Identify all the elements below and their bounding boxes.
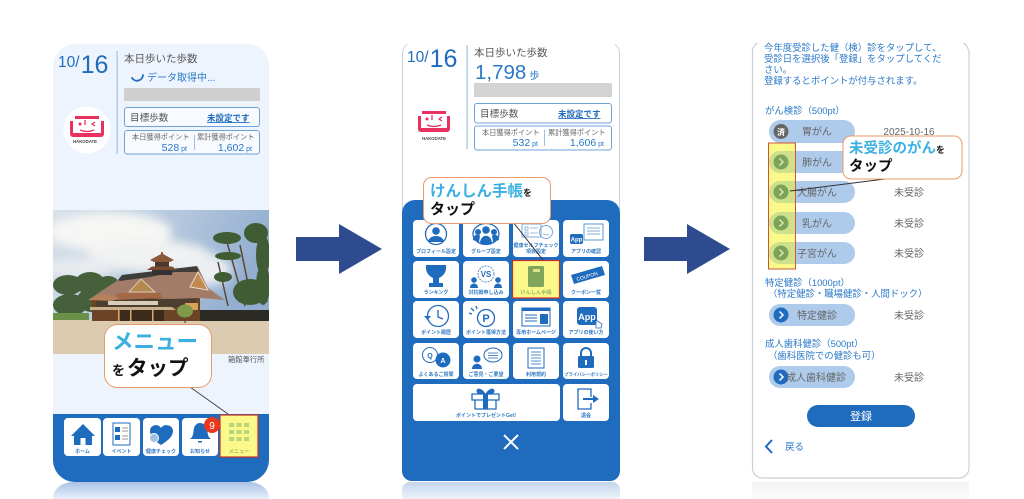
points box: 1,606 pt bbox=[570, 137, 604, 149]
callout: unscreened cancer tap: 未受診のがんを bbox=[849, 139, 945, 157]
phone 1 date: 10/ bbox=[58, 54, 80, 71]
menu: how to use app: App bbox=[578, 312, 596, 322]
main roof bbox=[88, 267, 225, 300]
section: adult dental checkup: 成人歯科健診（500pt） bbox=[765, 338, 863, 349]
menu: kenshin techo highlighted: けんしん手帳 bbox=[520, 288, 552, 296]
callout: menu tap bbox=[104, 324, 228, 414]
left trees bbox=[53, 272, 119, 316]
section: cancer screening bbox=[765, 105, 935, 269]
menu: app check bbox=[563, 220, 609, 257]
row: uterine cancer: 子宮がん bbox=[797, 247, 837, 260]
lower wall bbox=[92, 298, 200, 321]
menu: group bbox=[463, 220, 509, 257]
menu: how to earn points: P bbox=[482, 313, 490, 325]
phone 1 reflection bbox=[53, 482, 269, 499]
goal steps box bbox=[474, 104, 612, 123]
menu: group: グループ設定 bbox=[471, 248, 501, 255]
back link: 戻る bbox=[785, 442, 804, 453]
loading indicator: データ取得中... bbox=[147, 71, 215, 84]
goal steps box: 目標歩数 bbox=[480, 108, 519, 120]
photo: Hakodate magistrate office bbox=[44, 210, 270, 354]
instructions text: 今年度受診した健（検）診をタップして、 bbox=[764, 42, 941, 53]
points box bbox=[124, 130, 260, 154]
row: breast cancer: 未受診 bbox=[894, 218, 924, 230]
menu: versus: VS bbox=[481, 270, 492, 279]
section: adult dental checkup: （歯科医院での健診も可） bbox=[768, 350, 881, 361]
menu: withdraw: 退会 bbox=[581, 412, 591, 419]
points box bbox=[474, 126, 612, 150]
tower bbox=[150, 252, 174, 262]
nav: home bbox=[64, 418, 101, 456]
section: specific checkup: 未受診 bbox=[894, 310, 924, 322]
menu: how to earn points: ポイント獲得方法 bbox=[466, 329, 506, 336]
callout: unscreened cancer tap bbox=[790, 136, 962, 191]
callout: unscreened cancer tap: タップ bbox=[849, 158, 893, 175]
row: uterine cancer bbox=[769, 242, 924, 264]
nav: home: ホーム bbox=[75, 448, 90, 455]
phone 2 logo: HAKODATE bbox=[422, 136, 446, 141]
menu: point history bbox=[413, 301, 459, 338]
highlight column border bbox=[768, 143, 796, 269]
callout: menu tap: をタップ bbox=[112, 357, 189, 380]
menu: how to earn points bbox=[463, 301, 509, 338]
nav: notice bbox=[182, 417, 220, 456]
menu: privacy policy bbox=[563, 343, 609, 379]
points box: 本日獲得ポイント bbox=[482, 128, 540, 137]
row: breast cancer: 乳がん bbox=[802, 217, 832, 230]
photo caption: 箱館奉行所 bbox=[228, 355, 265, 364]
nav: menu highlighted: メニュー bbox=[229, 448, 249, 455]
nav: notice: お知らせ bbox=[190, 448, 210, 455]
menu: profile: プロフィール設定 bbox=[416, 248, 456, 255]
highlight column background bbox=[768, 143, 796, 269]
row: colon cancer bbox=[769, 181, 924, 203]
clouds bbox=[44, 212, 231, 286]
notification badge: 9 bbox=[209, 421, 215, 432]
menu: FAQ: A bbox=[440, 358, 446, 365]
goal steps box: 未設定です bbox=[558, 109, 601, 119]
phone 1 logo bbox=[64, 106, 110, 154]
close icon bbox=[504, 435, 518, 449]
fence bbox=[199, 310, 269, 321]
menu: versus: 対抗戦申し込み bbox=[468, 289, 504, 296]
menu: FAQ: Q bbox=[427, 353, 433, 360]
small tree bbox=[184, 316, 186, 323]
instructions text bbox=[764, 42, 942, 86]
row: uterine cancer: 未受診 bbox=[894, 248, 924, 260]
menu: terms: 利用規約 bbox=[526, 371, 546, 378]
menu: app check: App bbox=[571, 238, 583, 244]
phone 2 logo bbox=[418, 111, 450, 141]
points box: 532 pt bbox=[513, 137, 538, 149]
phone 1 date: 16 bbox=[81, 51, 108, 79]
section: specific checkup: 特定健診（1000pt） bbox=[765, 277, 850, 288]
phone 2 steps: 本日歩いた歩数 bbox=[474, 46, 548, 59]
callout: kenshin techo tap: タップ bbox=[430, 201, 475, 218]
nav: menu highlighted bbox=[220, 415, 258, 457]
menu: how to use app bbox=[563, 301, 609, 338]
section: specific checkup bbox=[765, 277, 927, 326]
row: colon cancer: 大腸がん bbox=[797, 186, 837, 199]
menu: ranking: ランキング bbox=[424, 289, 448, 296]
nav: event: イベント bbox=[111, 449, 132, 455]
section: adult dental checkup: 未受診 bbox=[894, 372, 924, 384]
menu: FAQ: よくあるご質問 bbox=[418, 371, 454, 378]
menu: how to use app: アプリの使い方 bbox=[568, 329, 604, 336]
phone 2: menu screen bbox=[402, 40, 620, 499]
arrow 2 bbox=[644, 224, 730, 274]
grey bar bbox=[124, 88, 260, 101]
right pines bbox=[218, 242, 267, 306]
callout: kenshin techo tap: けんしん手帳を bbox=[430, 181, 532, 200]
section: adult dental checkup bbox=[765, 338, 924, 388]
back link bbox=[766, 440, 804, 453]
menu: coupon bbox=[563, 261, 609, 298]
nav: event bbox=[103, 418, 140, 456]
phone 1: home screen bbox=[44, 44, 270, 499]
row: breast cancer bbox=[769, 212, 924, 234]
nav: health check: 健康チェック bbox=[146, 448, 176, 455]
menu: withdraw bbox=[563, 384, 609, 421]
row: stomach cancer bbox=[769, 120, 935, 143]
nav: health check bbox=[143, 418, 179, 456]
menu: ranking bbox=[413, 261, 459, 298]
callout: menu tap: メニュー bbox=[112, 330, 198, 354]
menu: health check settings: 項目設定 bbox=[526, 248, 546, 255]
arrow 1 bbox=[296, 224, 382, 274]
row: stomach cancer: 2025-10-16 bbox=[883, 127, 935, 138]
bottom navigation bar bbox=[53, 414, 269, 482]
instructions text: 受診日を選択後「登録」をタップしてくだ bbox=[764, 53, 942, 64]
menu: feedback bbox=[463, 343, 509, 379]
menu: FAQ bbox=[413, 343, 459, 379]
phone 2 steps bbox=[474, 46, 548, 84]
phone 2 reflection bbox=[402, 482, 620, 499]
grey bar bbox=[474, 83, 612, 97]
menu: website: 専用ホームページ bbox=[516, 329, 556, 336]
phone 2 steps: 1,798 歩 bbox=[475, 61, 539, 84]
row: lung cancer: 肺がん bbox=[802, 156, 832, 169]
register button: 登録 bbox=[850, 409, 872, 423]
callout: kenshin techo tap bbox=[424, 178, 550, 260]
phone 2 date: 16 bbox=[430, 45, 457, 73]
menu: profile bbox=[413, 220, 459, 257]
phone 1 logo: HAKODATE bbox=[73, 139, 97, 144]
menu: coupon: COUPON bbox=[576, 271, 599, 283]
section: cancer screening: がん検診（500pt） bbox=[765, 105, 845, 116]
register button bbox=[807, 405, 915, 427]
phone 3: checkup registration screen bbox=[752, 40, 969, 499]
instructions text: さい。 bbox=[764, 64, 792, 75]
menu: point history: ポイント履歴 bbox=[421, 329, 451, 336]
menu panel bbox=[402, 200, 620, 481]
loading indicator bbox=[132, 71, 215, 84]
row: colon cancer: 未受診 bbox=[894, 187, 924, 199]
section: specific checkup: （特定健診・職場健診・人間ドック） bbox=[768, 288, 927, 299]
menu: present bbox=[413, 384, 560, 421]
menu: app check: アプリの確認 bbox=[571, 248, 601, 255]
goal steps box: 未設定です bbox=[207, 113, 250, 123]
points box: 1,602 pt bbox=[218, 142, 252, 154]
menu: feedback: ご意見・ご要望 bbox=[468, 371, 504, 378]
points box: 累計獲得ポイント bbox=[197, 132, 255, 142]
section: adult dental checkup: 成人歯科健診 bbox=[786, 371, 846, 384]
menu: health check settings: 健康セルフチェック bbox=[513, 242, 559, 249]
menu: health check settings bbox=[513, 220, 559, 257]
menu: website bbox=[513, 301, 559, 338]
phone 3 reflection bbox=[752, 482, 969, 499]
instructions text: 登録するとポイントが付与されます。 bbox=[764, 75, 922, 86]
menu: coupon: クーポン一覧 bbox=[571, 289, 601, 296]
points box: 累計獲得ポイント bbox=[548, 128, 606, 137]
goal steps box bbox=[124, 108, 260, 126]
phone 3 background bbox=[752, 40, 969, 478]
section: specific checkup: 特定健診 bbox=[797, 310, 837, 322]
phone 1 steps heading: 本日歩いた歩数 bbox=[124, 52, 198, 65]
menu: present: ポイントでプレゼントGet! bbox=[456, 412, 516, 419]
phone 2 date: 10/ bbox=[407, 49, 429, 66]
phone 2 background bbox=[402, 40, 620, 481]
menu: terms bbox=[513, 343, 559, 379]
phone 1 background bbox=[53, 44, 269, 482]
points box: 528 pt bbox=[162, 142, 187, 154]
menu: privacy policy: プライバシーポリシー bbox=[564, 371, 608, 378]
menu: versus bbox=[463, 261, 509, 298]
ground bbox=[53, 320, 269, 354]
menu: kenshin techo highlighted bbox=[512, 260, 560, 298]
row: lung cancer bbox=[769, 151, 843, 173]
row: stomach cancer: 胃がん bbox=[802, 125, 832, 138]
goal steps box: 目標歩数 bbox=[130, 112, 169, 124]
row: stomach cancer: 済 bbox=[777, 127, 785, 137]
points box: 本日獲得ポイント bbox=[132, 132, 190, 142]
